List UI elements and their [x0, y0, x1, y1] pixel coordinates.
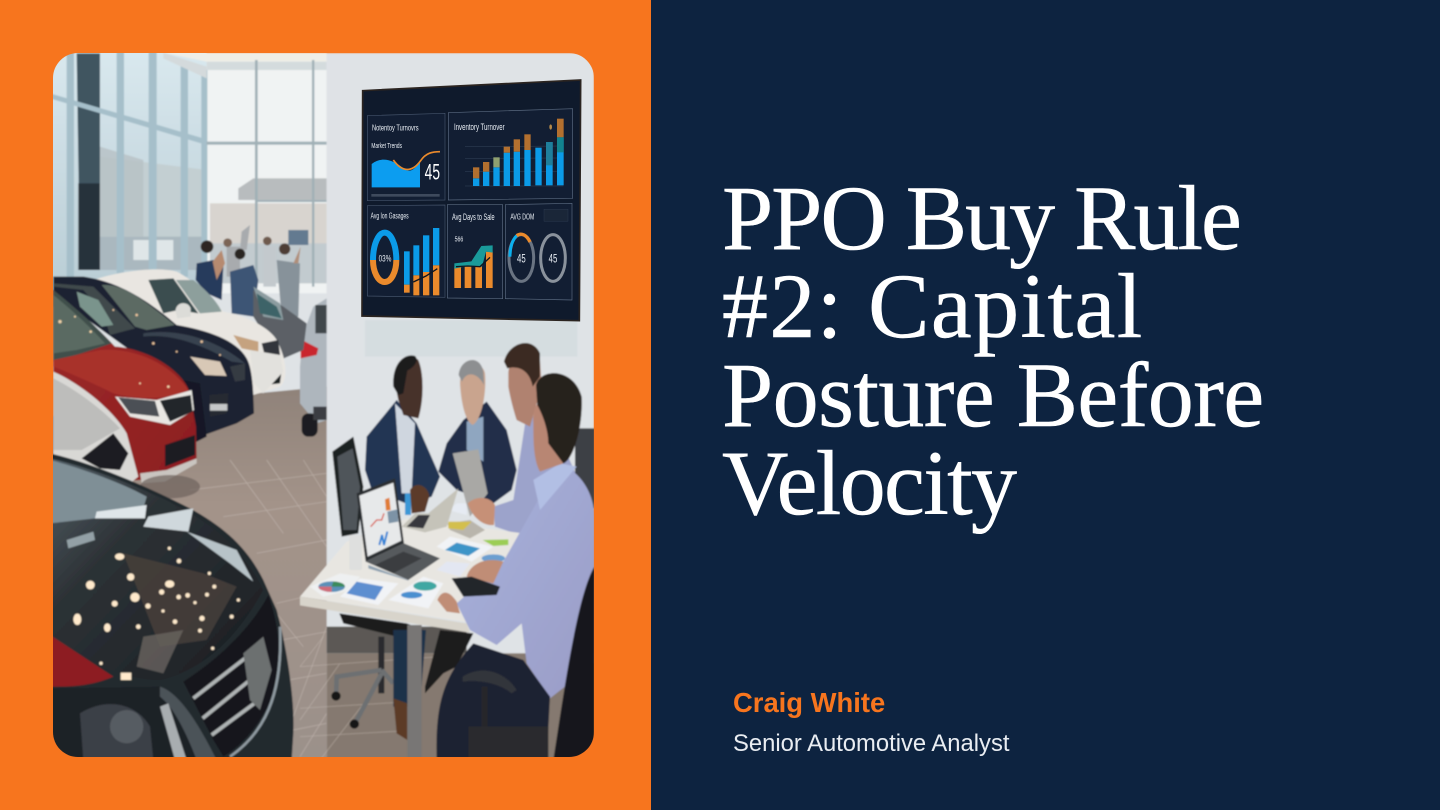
hands: [468, 498, 495, 525]
panel: gauge and stacked bars: [367, 205, 445, 297]
panel: navy right background: [651, 0, 1440, 810]
navy sedan: [53, 277, 254, 437]
panel: avg dom gauges: AVG DOM: [510, 212, 534, 222]
hood lights reflections: [72, 545, 242, 682]
panel: avg days to sale: [447, 205, 503, 299]
panel: gauge and stacked bars: 03%: [379, 253, 391, 263]
panel: market trends: 45: [425, 159, 440, 184]
photo: car dealership showroom with analysts meeting: [53, 53, 594, 757]
cup on table: [350, 536, 362, 570]
wall-mounted dashboard screen: [362, 80, 581, 321]
far silver car at the wall: [300, 298, 327, 437]
meeting table scene: [300, 320, 594, 760]
man four, front: [436, 373, 594, 760]
panel: market trends: Notentoy Turnovrs: [372, 123, 419, 133]
title: Posture Before: [722, 344, 1264, 446]
title: PPO Buy Rule: [722, 167, 1240, 269]
red sedan: [53, 290, 197, 483]
author role: Senior Automotive Analyst: [733, 730, 1009, 757]
blurred background people: [196, 225, 301, 317]
panel: gauge and stacked bars: Avg Ion Gasages: [371, 211, 409, 221]
headlight: [54, 692, 186, 756]
white car: [93, 269, 285, 395]
panel: avg dom gauges: [505, 203, 572, 300]
title: [722, 167, 1264, 534]
title: #2: Capital: [722, 255, 1144, 357]
table top: [300, 518, 523, 623]
legs under table: [393, 630, 426, 707]
man three: [493, 343, 580, 535]
panel: inventory turnover bar chart: Inventory Turnover: [454, 122, 505, 132]
title: Velocity: [722, 432, 1015, 534]
showroom floor: [50, 387, 327, 783]
floor tile lines and big foreground car: [50, 453, 327, 760]
panel: avg dom gauges: 45: [549, 252, 558, 266]
panel: avg dom gauges: 45: [517, 252, 526, 266]
panel: market trends: [367, 113, 445, 201]
dark sedan behind white car: [253, 290, 307, 360]
panel: avg days to sale: 566: [455, 234, 463, 243]
back right chair: [575, 428, 594, 508]
grille: [183, 595, 279, 757]
laptop open facing camera: [357, 478, 440, 581]
man two: [438, 360, 517, 503]
panel: market trends: Market Trends: [371, 143, 402, 150]
left chair: [330, 436, 411, 730]
author name: Craig White: [733, 687, 885, 718]
showroom windows and first cars: [53, 53, 328, 757]
panel: inventory turnover bar chart: [448, 109, 573, 200]
big foreground car body: [50, 453, 294, 760]
man one: [365, 355, 440, 515]
panel: orange left background: [0, 0, 651, 810]
center silver laptop: [402, 449, 488, 532]
panel: avg days to sale: Avg Days to Sale: [452, 212, 495, 222]
silver car: [53, 372, 138, 483]
table papers and charts: [310, 503, 508, 608]
